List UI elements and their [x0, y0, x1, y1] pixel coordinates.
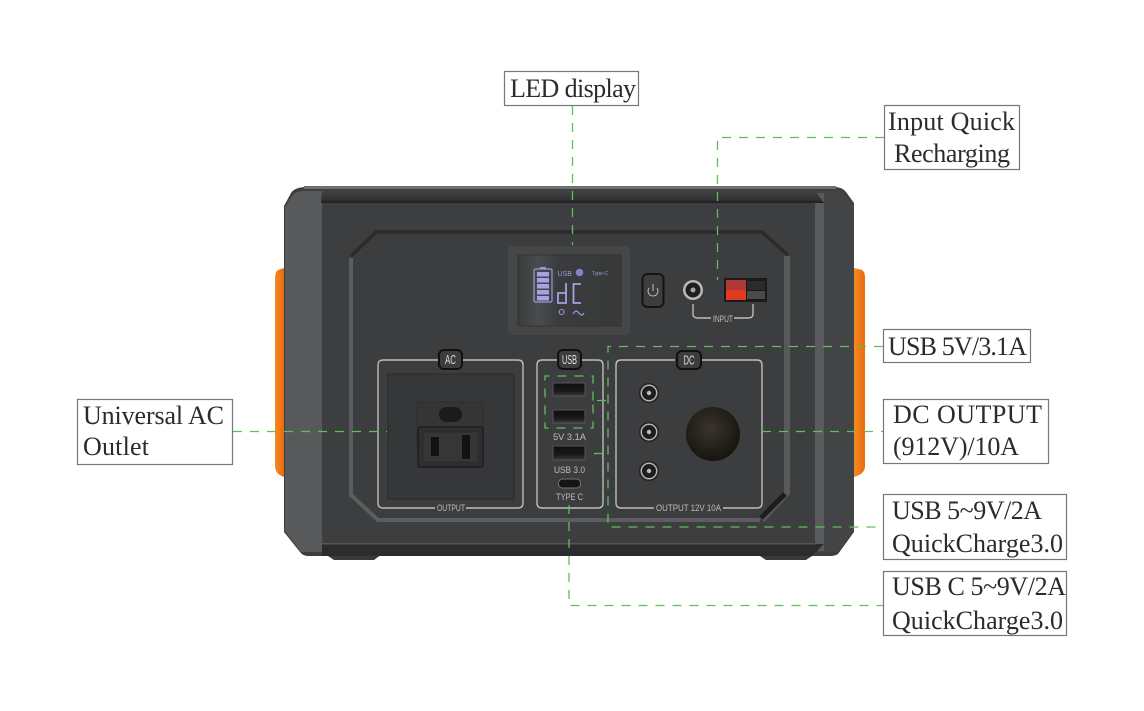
label: USB 5~9V/2A — [884, 494, 1066, 560]
input port — [683, 280, 703, 300]
label: LED display: LED display — [510, 74, 636, 103]
left side panel — [285, 191, 322, 552]
label: USB C 5~9V/2A: USB C 5~9V/2A — [892, 572, 1066, 601]
top edge — [321, 190, 824, 203]
label: Universal AC Outlet — [78, 400, 232, 464]
USB panel — [537, 350, 603, 508]
leader: USB 5V group outline — [545, 376, 608, 428]
label: Input Quick Recharging: Recharging — [894, 139, 1010, 168]
label: DC output: DC OUTPUT — [893, 400, 1042, 429]
AC badge — [439, 350, 462, 369]
USB badge — [558, 350, 581, 369]
bottom edge — [322, 544, 824, 556]
DC panel: OUTPUT 12V 10A — [656, 503, 722, 514]
power station device — [275, 186, 865, 560]
label: USB 5~9V/2A: QuickCharge3.0 — [892, 529, 1063, 558]
LED display — [508, 246, 630, 335]
leader: USB C — [569, 505, 883, 606]
input connector — [724, 278, 767, 302]
AC panel — [378, 350, 523, 514]
label: USB 5V/3.1A: USB 5V/3.1A — [888, 332, 1027, 361]
USB panel: TYPE C — [556, 492, 583, 503]
DC badge — [677, 351, 701, 369]
label: DC output: (912V)/10A — [893, 432, 1019, 461]
label: USB C 5~9V/2A — [884, 572, 1066, 636]
label: USB C 5~9V/2A: QuickCharge3.0 — [892, 606, 1063, 635]
leader: USB 5V/3.1A — [608, 346, 883, 527]
cigarette socket cap — [686, 407, 740, 461]
input bracket: INPUT — [713, 314, 733, 325]
leader: input recharging — [718, 138, 884, 280]
label: Universal AC Outlet: Outlet — [83, 432, 150, 461]
label: USB 5~9V/2A: USB 5~9V/2A — [892, 496, 1042, 525]
AC badge: AC — [445, 353, 456, 367]
label: Input Quick Recharging: Input Quick — [888, 107, 1015, 136]
DC ports — [639, 383, 659, 481]
USB panel: 5V 3.1A — [553, 432, 587, 443]
input bracket — [693, 304, 753, 325]
AC panel: OUTPUT — [437, 503, 465, 514]
leader: LED display — [572, 106, 574, 245]
battery icon — [534, 267, 552, 302]
leader: DC output — [762, 430, 883, 432]
label: Input Quick Recharging — [884, 106, 1020, 170]
DC badge: DC — [684, 354, 694, 368]
DC panel — [616, 351, 762, 514]
left orange handle — [275, 268, 284, 477]
label: DC output — [884, 400, 1048, 464]
label: Universal AC Outlet: Universal AC — [83, 401, 224, 430]
USB badge: USB — [562, 353, 577, 367]
LED display: Type-C — [592, 271, 609, 277]
casing — [284, 187, 854, 556]
inset panel outline — [350, 230, 790, 522]
leader: AC outlet — [233, 430, 387, 432]
display readout: USB — [558, 271, 572, 278]
outlet socket — [418, 427, 483, 467]
right side panel — [815, 191, 854, 552]
feet — [325, 554, 815, 560]
right orange handle — [854, 268, 865, 477]
power button — [642, 274, 664, 307]
USB panel: USB 3.0 — [554, 465, 585, 476]
leader: USB 3.0 link — [594, 452, 608, 454]
